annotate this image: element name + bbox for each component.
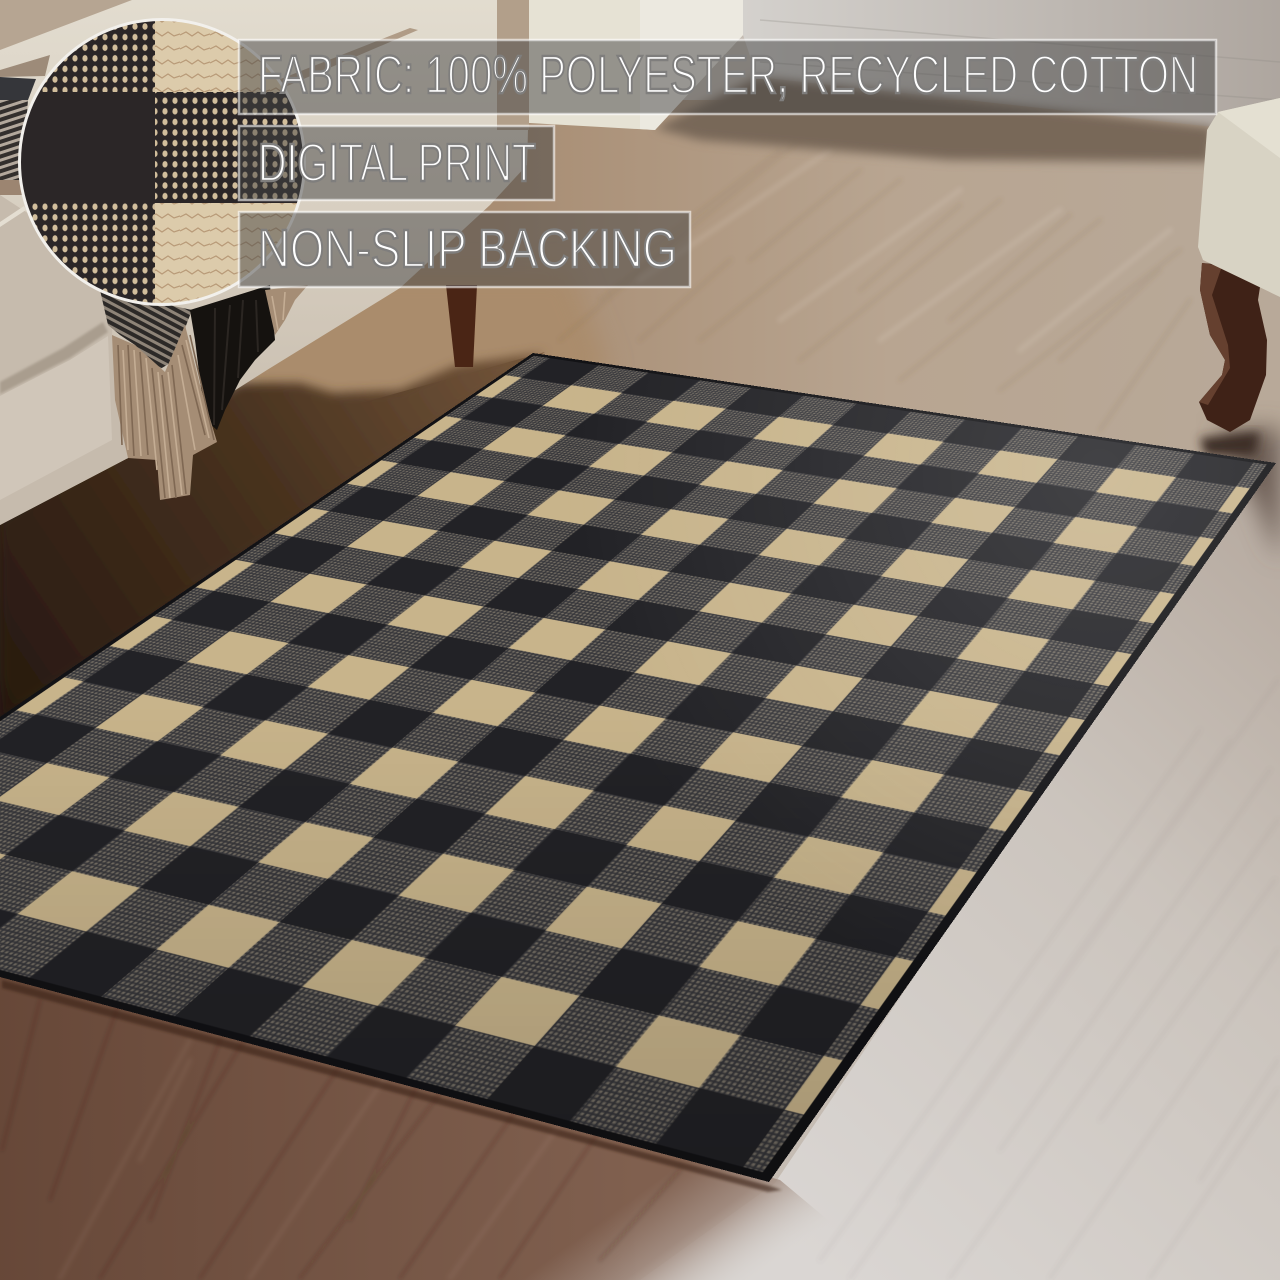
rug lighting: [0, 379, 1276, 1182]
tan fringe: [112, 285, 308, 500]
chair leg: [1199, 263, 1267, 432]
sofa body: [0, 0, 529, 525]
overlay: swatch and feature labels: [18, 18, 1218, 306]
chair cushion: [1198, 98, 1280, 297]
chair leg shadow: [1200, 432, 1260, 455]
label: non-slip backing: [239, 212, 690, 287]
wall: [743, 0, 1280, 132]
striped throw on sofa: [0, 55, 192, 372]
chair shadow: [1215, 428, 1280, 560]
label: digital print: DIGITAL PRINT: [258, 133, 536, 193]
rug contact shadow: [2, 980, 782, 1192]
shadow under sofa: [0, 352, 545, 722]
black fringe: [190, 285, 275, 430]
fabric swatch circle: [15, 15, 310, 308]
sofa leg: [446, 285, 477, 367]
white pillar: [529, 0, 743, 130]
rug with buffalo check pattern: [0, 353, 1276, 1182]
label: non-slip backing: NON-SLIP BACKING: [258, 219, 677, 279]
shadow at wall base: [655, 77, 1213, 162]
label: digital print: [239, 126, 554, 200]
